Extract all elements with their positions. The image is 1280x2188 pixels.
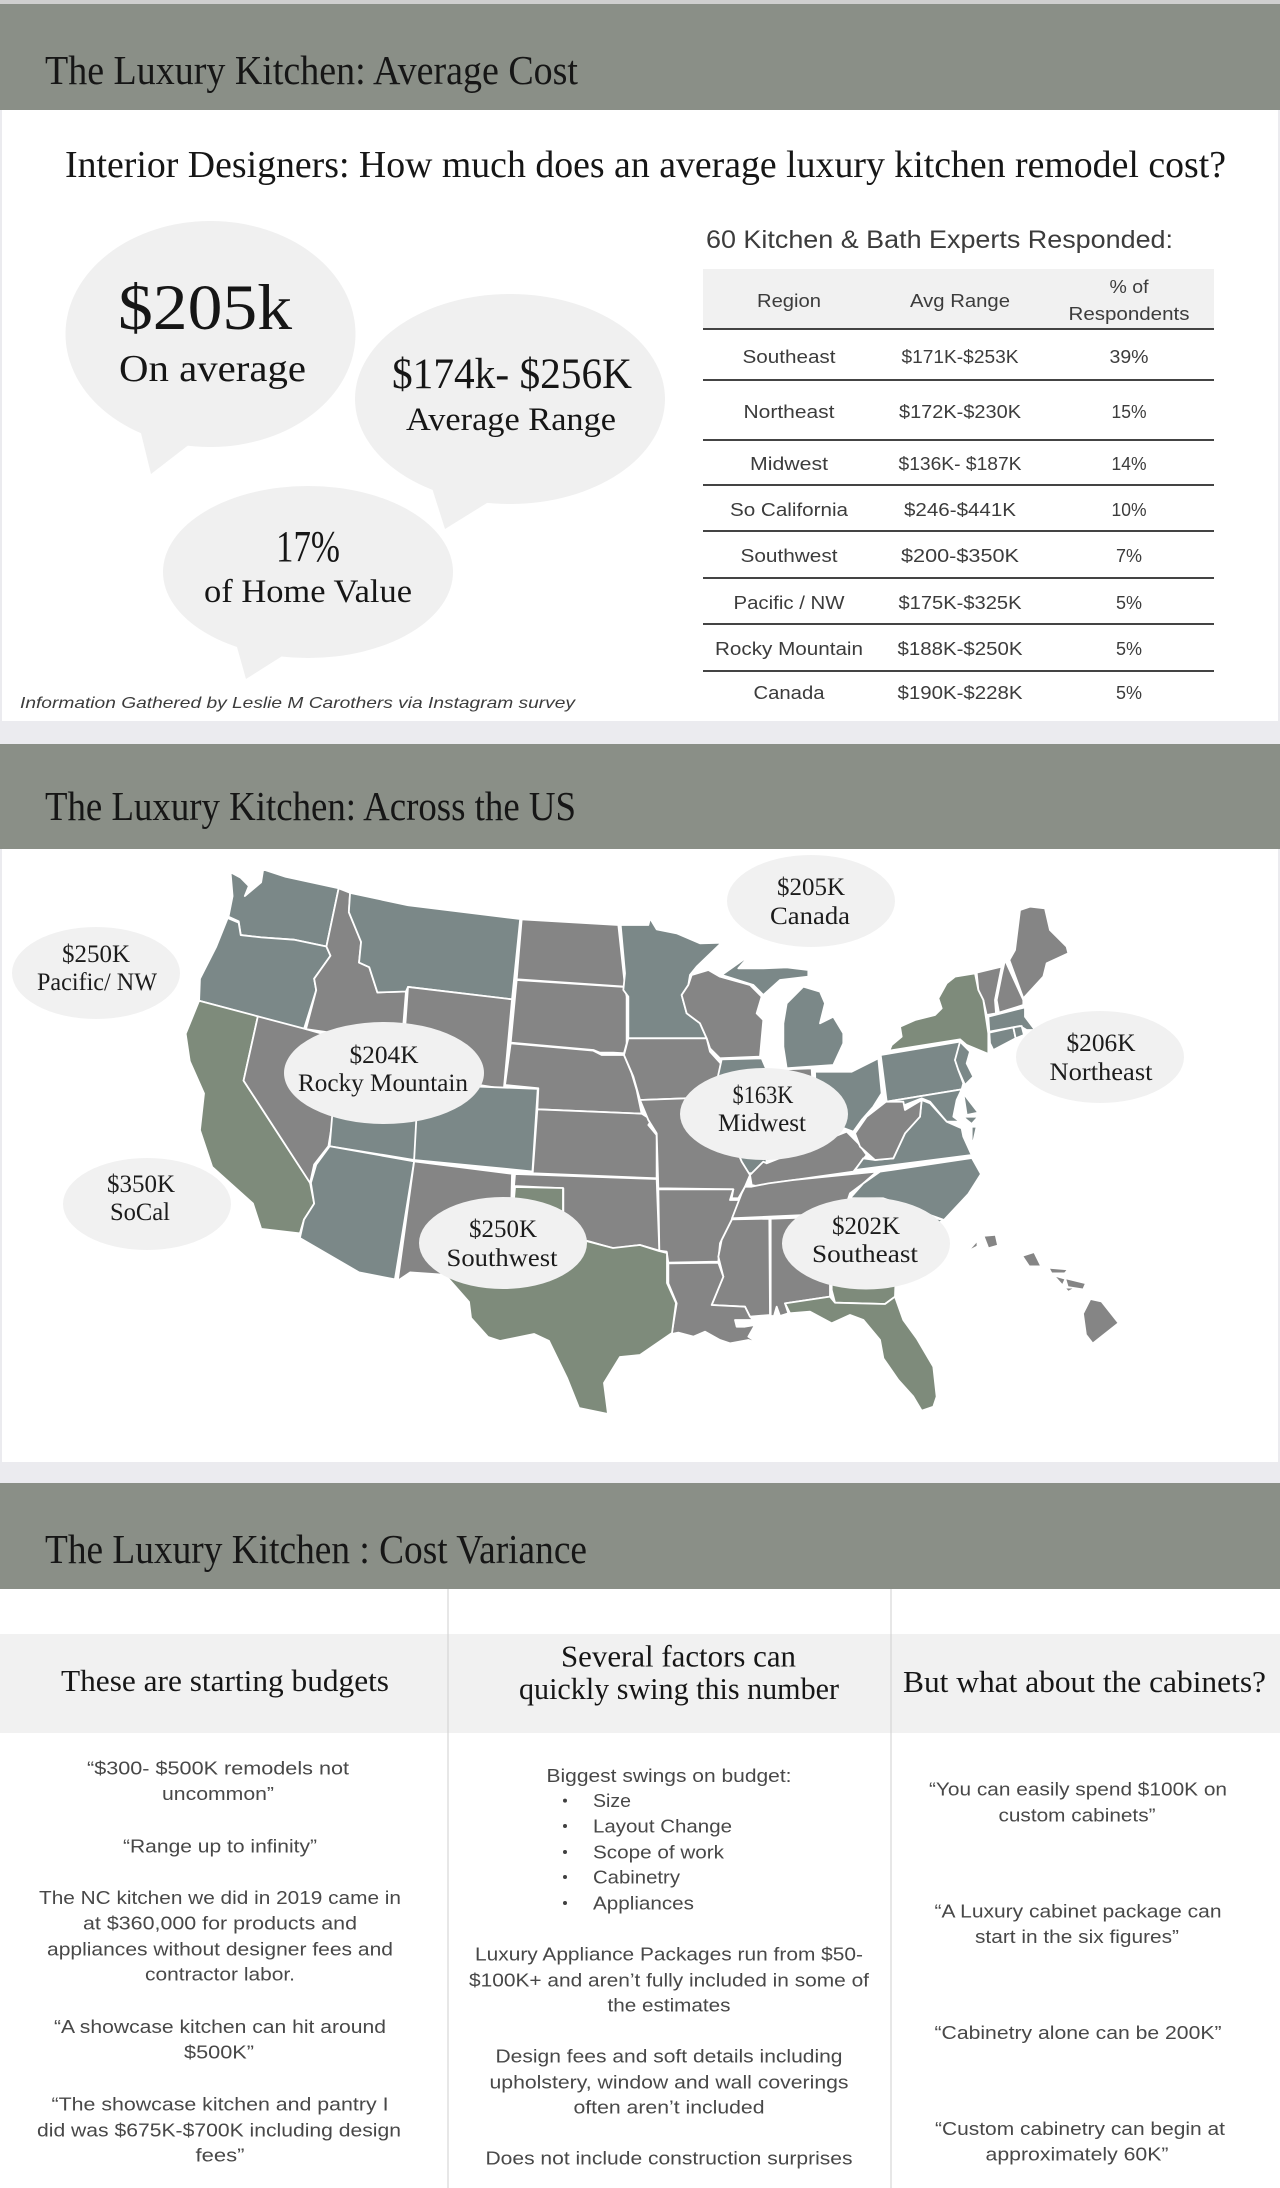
- map label: Midwest: Midwest: [718, 1110, 806, 1137]
- column text: starting budgets: “Range up to infinity”: [123, 1836, 317, 1856]
- column text: starting budgets: appliances without designer fees and: [47, 1938, 393, 1960]
- map label: Midwest: [680, 1068, 848, 1160]
- bullet list: Size: [593, 1790, 631, 1811]
- map label: Pacific NW: $250K: [62, 941, 130, 968]
- map of the United States: [186, 869, 1117, 1414]
- table: regional cost ranges: 5%: [1116, 638, 1142, 659]
- map label: Southeast: Southeast: [812, 1241, 918, 1268]
- state: Texas: [447, 1187, 676, 1414]
- column text: starting budgets: fees”: [196, 2144, 244, 2166]
- map label: Southwest: Southwest: [446, 1245, 558, 1272]
- column text: budget swing factors: Design fees and soft details including: [496, 2046, 842, 2066]
- column heading band: [0, 1589, 1280, 2188]
- callout: on average: $205k: [118, 272, 293, 344]
- table: regional cost ranges: 5%: [1116, 592, 1142, 613]
- header band: cost variance: [0, 1483, 1280, 1589]
- central states: [505, 918, 882, 1263]
- table: regional cost ranges: $200-$350K: [901, 545, 1020, 566]
- map label: Southwest: $250K: [469, 1216, 537, 1243]
- table: regional cost ranges: Southeast: [742, 346, 836, 367]
- column text: starting budgets: contractor labor.: [145, 1964, 295, 1984]
- table: regional cost ranges: Southwest: [740, 545, 838, 566]
- column text: starting budgets: did was $675K-$700K including design: [37, 2120, 401, 2140]
- callout: on average: On average: [119, 348, 306, 390]
- table: regional cost ranges: 7%: [1116, 545, 1142, 566]
- column text: cabinets: [929, 1778, 1227, 2164]
- column heading band: quickly swing this number: [519, 1671, 840, 1706]
- table: regional cost ranges: Canada: [754, 682, 825, 703]
- column text: budget swing factors: $100K+ and aren’t fully included in some of: [469, 1970, 870, 1990]
- table: regional cost ranges: Pacific / NW: [734, 592, 845, 613]
- header band: average cost: The Luxury Kitchen: Average Cost: [45, 47, 579, 93]
- panel: across the US: [0, 744, 1280, 1462]
- column text: starting budgets: [37, 1758, 401, 2166]
- map label: Canada: Canada: [770, 903, 850, 930]
- southeastern states: [668, 1158, 981, 1411]
- map label: SoCal: $350K: [107, 1171, 175, 1198]
- map label: Southwest: [419, 1197, 587, 1289]
- map label: Northeast: $206K: [1066, 1030, 1136, 1057]
- map label: Northeast: Northeast: [1050, 1059, 1153, 1086]
- column heading band: Several factors can: [561, 1638, 796, 1674]
- column text: cabinets: approximately 60K”: [986, 2144, 1168, 2164]
- header band: across the US: The Luxury Kitchen: Across the US: [45, 783, 576, 829]
- column text: budget swing factors: the estimates: [608, 1994, 730, 2016]
- column text: cabinets: custom cabinets”: [998, 1804, 1156, 1826]
- column heading band: But what about the cabinets?: [903, 1664, 1266, 1699]
- table: regional cost ranges: 39%: [1110, 346, 1148, 367]
- callout: average range: Average Range: [406, 402, 616, 438]
- table: regional cost ranges: 10%: [1112, 499, 1146, 520]
- callout: on average: [66, 221, 356, 474]
- column text: budget swing factors: upholstery, window and wall coverings: [490, 2072, 848, 2092]
- column text: budget swing factors: Does not include construction surprises: [486, 2148, 852, 2168]
- table: regional cost ranges: $171K-$253K: [902, 346, 1019, 367]
- map label: Pacific NW: [12, 927, 180, 1019]
- table: regional cost ranges: Avg Range: [910, 290, 1010, 311]
- table: regional cost ranges: [703, 269, 1214, 703]
- table: regional cost ranges: Region: [757, 290, 821, 311]
- table: regional cost ranges: $190K-$228K: [898, 682, 1023, 703]
- column text: starting budgets: at $360,000 for products and: [83, 1912, 357, 1934]
- callout: average range: $174k- $256K: [392, 351, 632, 398]
- bullet list: Cabinetry: [593, 1866, 681, 1888]
- column text: starting budgets: “$300- $500K remodels not: [87, 1758, 349, 1778]
- table: regional cost ranges: Respondents: [1068, 303, 1190, 324]
- bullet list: Layout Change: [593, 1816, 732, 1836]
- table: regional cost ranges: $172K-$230K: [899, 401, 1022, 422]
- map label: Midwest: $163K: [732, 1082, 794, 1109]
- header band: across the US: [0, 744, 1280, 849]
- bullet list: Scope of work: [593, 1842, 725, 1862]
- column text: cabinets: start in the six figures”: [975, 1926, 1179, 1947]
- callout: percent of home value: 17%: [276, 522, 340, 571]
- callout: average range: [355, 294, 665, 529]
- table: regional cost ranges: $175K-$325K: [898, 592, 1022, 613]
- state: Hawaii: [971, 1236, 1117, 1342]
- column heading band: These are starting budgets: [61, 1663, 389, 1698]
- map label: Canada: $205K: [777, 874, 845, 901]
- map label: Pacific NW: Pacific/ NW: [37, 969, 157, 996]
- table: regional cost ranges: $246-$441K: [904, 499, 1017, 520]
- column text: budget swing factors: often aren’t included: [574, 2096, 764, 2118]
- header band: average cost: [0, 4, 1280, 110]
- callout: percent of home value: of Home Value: [204, 574, 412, 610]
- western states: [186, 869, 538, 1281]
- table: regional cost ranges: 14%: [1112, 453, 1146, 474]
- column text: starting budgets: “A showcase kitchen can hit around: [54, 2016, 386, 2037]
- map label: Southeast: [782, 1198, 950, 1290]
- panel: average cost: [0, 4, 1280, 721]
- table: regional cost ranges: $188K-$250K: [898, 638, 1023, 659]
- column text: cabinets: “Custom cabinetry can begin at: [935, 2118, 1225, 2139]
- table: regional cost ranges: Midwest: [750, 453, 828, 474]
- column text: cabinets: “A Luxury cabinet package can: [934, 1900, 1222, 1922]
- map label: Northeast: [1016, 1011, 1184, 1103]
- map label: Rocky Mountain: $204K: [350, 1042, 418, 1069]
- table: regional cost ranges: 5%: [1116, 682, 1142, 703]
- table: regional cost ranges: Northeast: [744, 401, 834, 422]
- map label: SoCal: SoCal: [110, 1199, 170, 1226]
- column text: budget swing factors: [469, 1765, 870, 2168]
- table: regional cost ranges: Rocky Mountain: [715, 638, 863, 659]
- table: regional cost ranges: So California: [730, 499, 849, 520]
- source note: Information Gathered by Leslie M Carothers via Instagram survey: [20, 695, 576, 712]
- header band: cost variance: The Luxury Kitchen : Cost Variance: [45, 1526, 587, 1572]
- bullet list: [563, 1790, 732, 1914]
- panel: cost variance: [0, 1483, 1280, 2188]
- map label: Rocky Mountain: [284, 1022, 484, 1124]
- callout: percent of home value: [163, 486, 453, 679]
- table: regional cost ranges: % of: [1110, 276, 1149, 297]
- column text: cabinets: “You can easily spend $100K on: [929, 1778, 1227, 1800]
- survey question heading: Interior Designers: How much does an average luxury kitchen remodel cost?: [65, 144, 1226, 186]
- map label: SoCal: [63, 1158, 231, 1250]
- bullet list: Appliances: [593, 1892, 694, 1914]
- map label: Rocky Mountain: Rocky Mountain: [298, 1070, 468, 1097]
- column text: starting budgets: $500K”: [184, 2042, 254, 2062]
- map label: Southeast: $202K: [832, 1213, 900, 1240]
- column text: budget swing factors: Luxury Appliance Packages run from $50-: [475, 1944, 863, 1964]
- column text: budget swing factors: Biggest swings on budget:: [546, 1765, 792, 1786]
- column text: starting budgets: uncommon”: [162, 1783, 274, 1804]
- column text: starting budgets: “The showcase kitchen and pantry I: [52, 2094, 388, 2114]
- column text: cabinets: “Cabinetry alone can be 200K”: [934, 2022, 1222, 2043]
- column text: starting budgets: The NC kitchen we did in 2019 came in: [39, 1887, 401, 1908]
- table: regional cost ranges: $136K- $187K: [898, 453, 1022, 474]
- table title: 60 Kitchen & Bath Experts Responded:: [706, 226, 1173, 254]
- northeastern states: [855, 907, 1068, 1170]
- table: regional cost ranges: 15%: [1112, 401, 1146, 422]
- map label: Canada: [727, 855, 895, 947]
